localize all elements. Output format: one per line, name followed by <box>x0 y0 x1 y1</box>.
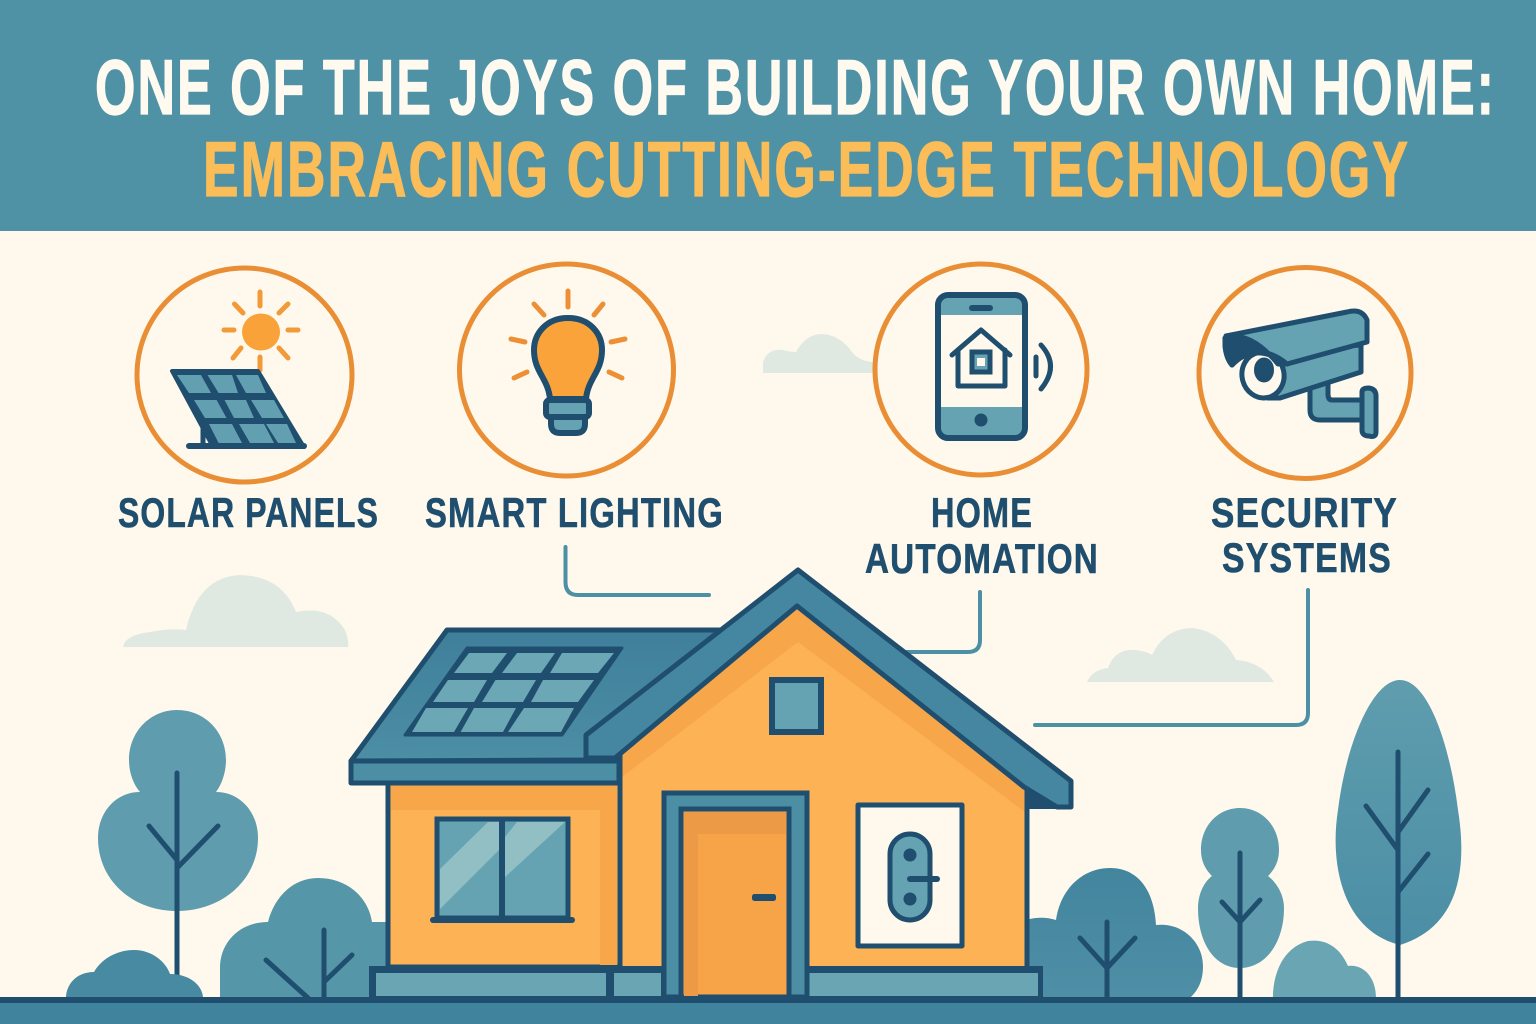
header banner <box>0 0 1536 231</box>
icon: security camera <box>1225 311 1376 436</box>
attic window <box>772 680 821 732</box>
icon: light bulb <box>534 318 602 433</box>
connector: home automation to house <box>905 592 980 652</box>
tree: tall right <box>1336 680 1461 998</box>
icon: bulb rays <box>511 291 625 378</box>
panel: solar panels <box>118 268 379 536</box>
cloud behind home automation <box>763 334 875 373</box>
label: SMART LIGHTING <box>425 489 724 536</box>
label: SECURITY <box>1211 489 1398 536</box>
left roof <box>351 630 725 761</box>
icon circle <box>875 264 1087 475</box>
label: AUTOMATION <box>865 535 1099 582</box>
cloud left <box>123 575 348 647</box>
tree: left bush with trunk <box>220 878 392 998</box>
icon: solar panel <box>172 371 304 447</box>
tree: left large <box>98 710 258 998</box>
connector: smart lighting to roof <box>566 547 709 595</box>
connector: security systems to house <box>1035 590 1308 725</box>
panel: smart lighting <box>425 264 724 536</box>
icon circle <box>1199 268 1411 478</box>
icon circle <box>137 268 352 482</box>
tree: small right <box>1198 808 1284 998</box>
icon: smartphone <box>938 295 1025 438</box>
main wall <box>620 608 1027 967</box>
panel: home automation <box>865 264 1099 582</box>
bush: right of house <box>1025 868 1203 998</box>
icon circle <box>460 264 674 476</box>
front gable roof <box>586 570 1071 807</box>
foundation <box>369 966 1043 998</box>
fascia <box>351 761 619 783</box>
label: HOME <box>931 489 1033 536</box>
icon: house on screen <box>952 330 1010 386</box>
bush: far right <box>1273 941 1376 998</box>
door <box>664 793 807 997</box>
gable eave shadow <box>1027 787 1056 809</box>
icon: signal waves <box>1036 345 1050 389</box>
bush: left small <box>66 950 203 998</box>
label: SOLAR PANELS <box>118 489 379 536</box>
door handle <box>752 894 776 901</box>
left window <box>433 819 572 920</box>
icon: sun <box>224 292 298 370</box>
roof solar panels <box>405 648 622 735</box>
house <box>351 570 1071 998</box>
cloud right <box>1087 628 1274 682</box>
label: SYSTEMS <box>1222 534 1392 581</box>
left wing wall <box>388 783 620 967</box>
smart lock panel <box>858 805 962 946</box>
ground <box>0 997 1536 1024</box>
panel: security systems <box>1199 268 1411 581</box>
